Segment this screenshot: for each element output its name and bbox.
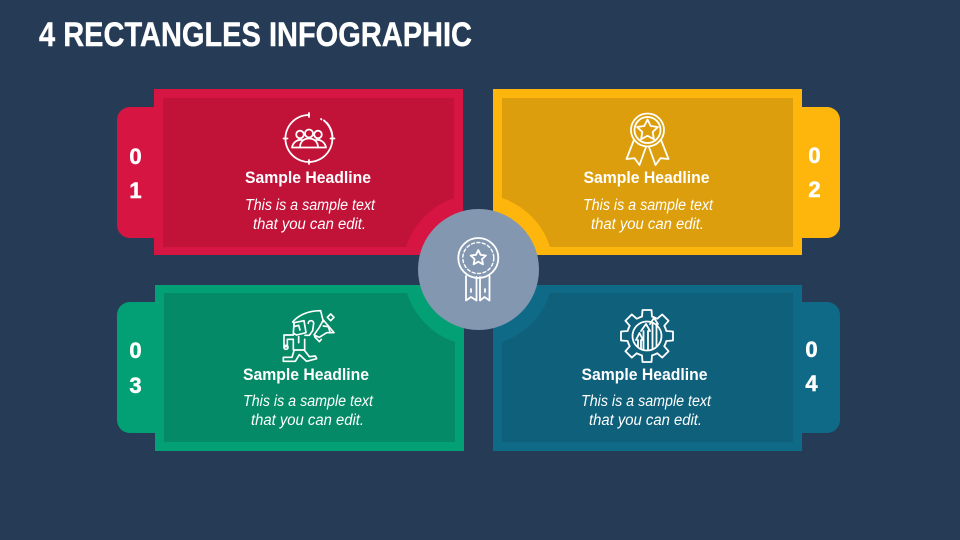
headline 01: Sample Headline <box>245 169 371 187</box>
number 02 <box>808 143 821 202</box>
outer rectangle 01 <box>154 89 463 255</box>
center circle <box>418 209 539 330</box>
body text 04: that you can edit. <box>589 412 702 429</box>
inner rectangle 03 <box>164 293 455 442</box>
inner rectangle 01 <box>163 98 454 247</box>
number tab 01 <box>117 107 160 238</box>
body text 01: that you can edit. <box>253 216 366 233</box>
inner rectangle 02 <box>502 98 793 247</box>
title: 4 RECTANGLES INFOGRAPHIC <box>39 16 472 54</box>
number 02: 2 <box>808 177 821 202</box>
outer rectangle 02 <box>493 89 802 255</box>
outer rectangle 04 <box>493 285 802 451</box>
panel: card 01 red <box>117 89 463 255</box>
body text 01: This is a sample text <box>245 197 376 214</box>
number tab 02 <box>796 107 840 238</box>
icon: target audience <box>284 113 334 164</box>
number 02: 0 <box>808 143 821 168</box>
body text 01 <box>245 197 376 233</box>
outer rectangle 03 <box>155 285 464 451</box>
number 01 <box>129 144 142 203</box>
inner rectangle 04 <box>502 293 793 442</box>
body text 02: that you can edit. <box>591 216 704 233</box>
body text 03 <box>243 393 374 429</box>
body text 03: that you can edit. <box>251 412 364 429</box>
icon: award ribbon <box>626 114 668 165</box>
body text 04: This is a sample text <box>581 393 712 410</box>
body text 04 <box>581 393 712 429</box>
number 04: 0 <box>805 337 818 362</box>
number 03: 0 <box>129 338 142 363</box>
panel: card 03 green <box>117 285 464 451</box>
number 04 <box>805 337 818 396</box>
body text 03: This is a sample text <box>243 393 374 410</box>
headline 03: Sample Headline <box>243 366 369 384</box>
body text 02 <box>583 197 714 233</box>
icon: center medal <box>458 238 498 300</box>
icon: runner with megaphone <box>283 311 334 361</box>
number tab 04 <box>796 302 840 433</box>
headline 04: Sample Headline <box>582 366 708 384</box>
number 03: 3 <box>129 373 142 398</box>
number 03 <box>129 338 142 398</box>
icon: gear with growth arrows <box>621 310 673 362</box>
headline 02: Sample Headline <box>584 169 710 187</box>
number 01: 1 <box>129 178 142 203</box>
panel: card 02 yellow <box>493 89 840 255</box>
panel: card 04 blue <box>493 285 840 451</box>
number tab 03 <box>117 302 160 433</box>
number 04: 4 <box>805 371 818 396</box>
body text 02: This is a sample text <box>583 197 714 214</box>
number 01: 0 <box>129 144 142 169</box>
